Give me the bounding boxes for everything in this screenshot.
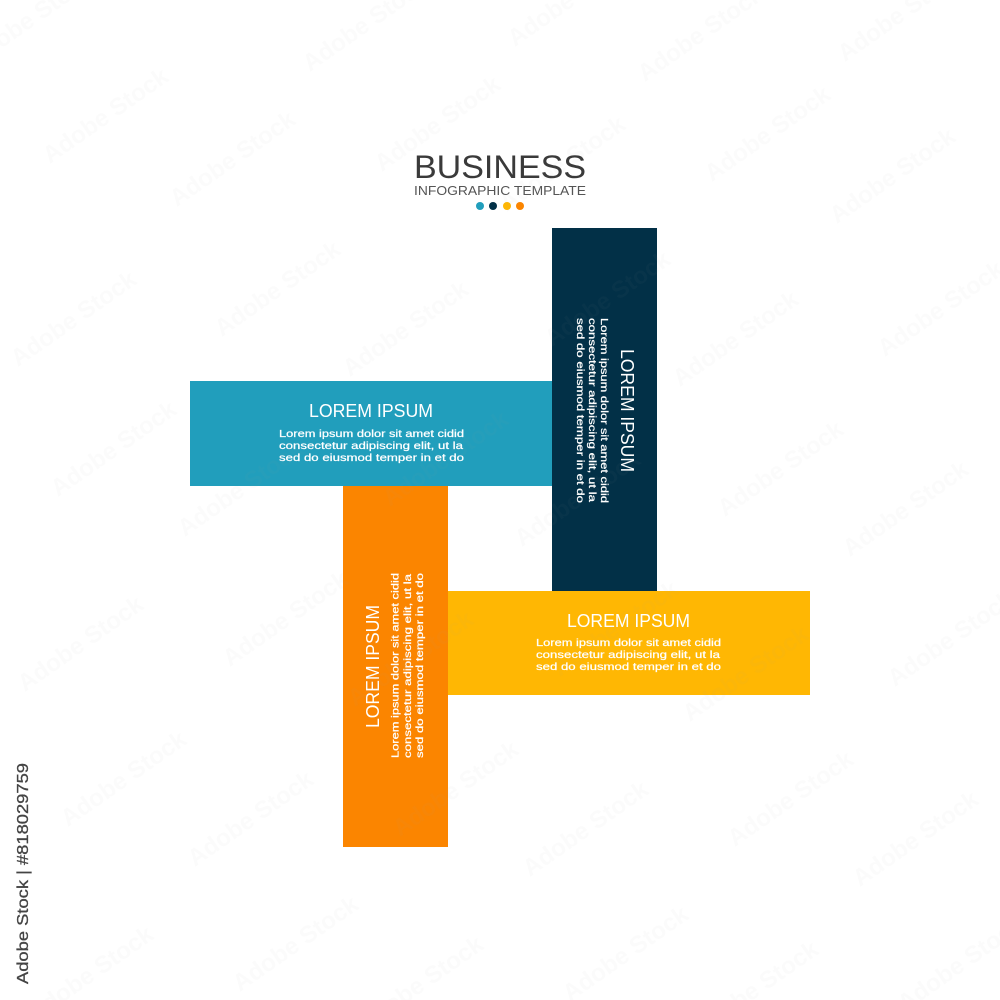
panel: blue horizontal bar	[190, 381, 552, 486]
yellow heading: LOREM IPSUM	[567, 611, 690, 631]
panel: yellow horizontal bar	[448, 591, 810, 695]
stock watermark pattern: Adobe Stock	[173, 435, 309, 542]
blue body text: consectetur adipiscing elit, ut la	[279, 440, 463, 452]
stock watermark pattern: Adobe Stock	[723, 745, 859, 852]
stock watermark pattern: Adobe Stock	[700, 80, 836, 187]
stock watermark pattern: Adobe Stock	[228, 890, 364, 997]
panel: navy vertical bar	[552, 228, 657, 591]
stock watermark pattern: Adobe Stock	[713, 415, 849, 522]
title block	[414, 149, 586, 210]
navy body text: sed do eiusmod temper in et do	[574, 318, 586, 503]
stock watermark pattern: Adobe Stock	[210, 235, 346, 342]
stock watermark pattern: Adobe Stock	[388, 735, 524, 842]
stock watermark pattern: Adobe Stock	[218, 565, 354, 672]
stock credit text: Adobe Stock | #818029759	[15, 763, 32, 984]
orange body text: Lorem ipsum dolor sit amet cidid	[390, 573, 402, 758]
navy body text	[574, 318, 610, 503]
stock watermark pattern: Adobe Stock	[165, 105, 301, 212]
stock watermark pattern: Adobe Stock	[338, 275, 474, 382]
blue heading: LOREM IPSUM	[309, 401, 433, 421]
stock watermark pattern: Adobe Stock	[678, 620, 814, 727]
stock watermark pattern: Adobe Stock	[183, 765, 319, 872]
navy body text: consectetur adipiscing elit, ut la	[586, 318, 598, 502]
heading: business: BUSINESS	[414, 149, 586, 185]
navy body text: Lorem ipsum dolor sit amet cidid	[598, 318, 610, 503]
orange body text	[390, 573, 426, 758]
stock watermark pattern: Adobe Stock	[668, 285, 804, 392]
navy heading: LOREM IPSUM	[617, 349, 637, 472]
stock watermark pattern: Adobe Stock	[370, 70, 506, 177]
blue body text: Lorem ipsum dolor sit amet cidid	[279, 428, 464, 440]
stock watermark pattern: Adobe Stock	[56, 725, 192, 832]
stock watermark pattern: Adobe Stock	[848, 785, 984, 892]
yellow body text: sed do eiusmod temper in et do	[536, 661, 721, 673]
stock watermark pattern: Adobe Stock	[510, 445, 646, 552]
stock watermark pattern: Adobe Stock	[343, 605, 479, 712]
stock watermark pattern: Adobe Stock	[38, 62, 174, 169]
stock watermark pattern: Adobe Stock	[548, 575, 684, 682]
blue body text: sed do eiusmod temper in et do	[279, 452, 464, 464]
stock watermark pattern: Adobe Stock	[6, 265, 142, 372]
orange body text: consectetur adipiscing elit, ut la	[402, 574, 414, 758]
subheading: infographic template: INFOGRAPHIC TEMPLATE	[414, 184, 586, 198]
stock watermark pattern: Adobe Stock	[518, 775, 654, 882]
orange body text: sed do eiusmod temper in et do	[414, 573, 426, 758]
orange heading: LOREM IPSUM	[363, 605, 383, 728]
panel: orange vertical bar	[343, 486, 448, 847]
stock watermark pattern: Adobe Stock	[13, 590, 149, 697]
stock watermark pattern: Adobe Stock	[378, 405, 514, 512]
stock watermark pattern: Adobe Stock	[825, 122, 961, 229]
colour dots	[476, 202, 524, 210]
stock watermark pattern: Adobe Stock	[838, 455, 974, 562]
yellow body text: consectetur adipiscing elit, ut la	[536, 649, 720, 661]
blue body text	[279, 428, 464, 464]
stock watermark pattern: Adobe Stock	[495, 110, 631, 217]
yellow body text	[536, 637, 721, 673]
stock watermark pattern: Adobe Stock	[46, 395, 182, 502]
yellow body text: Lorem ipsum dolor sit amet cidid	[536, 637, 721, 649]
stock watermark pattern: Adobe Stock	[540, 245, 676, 352]
